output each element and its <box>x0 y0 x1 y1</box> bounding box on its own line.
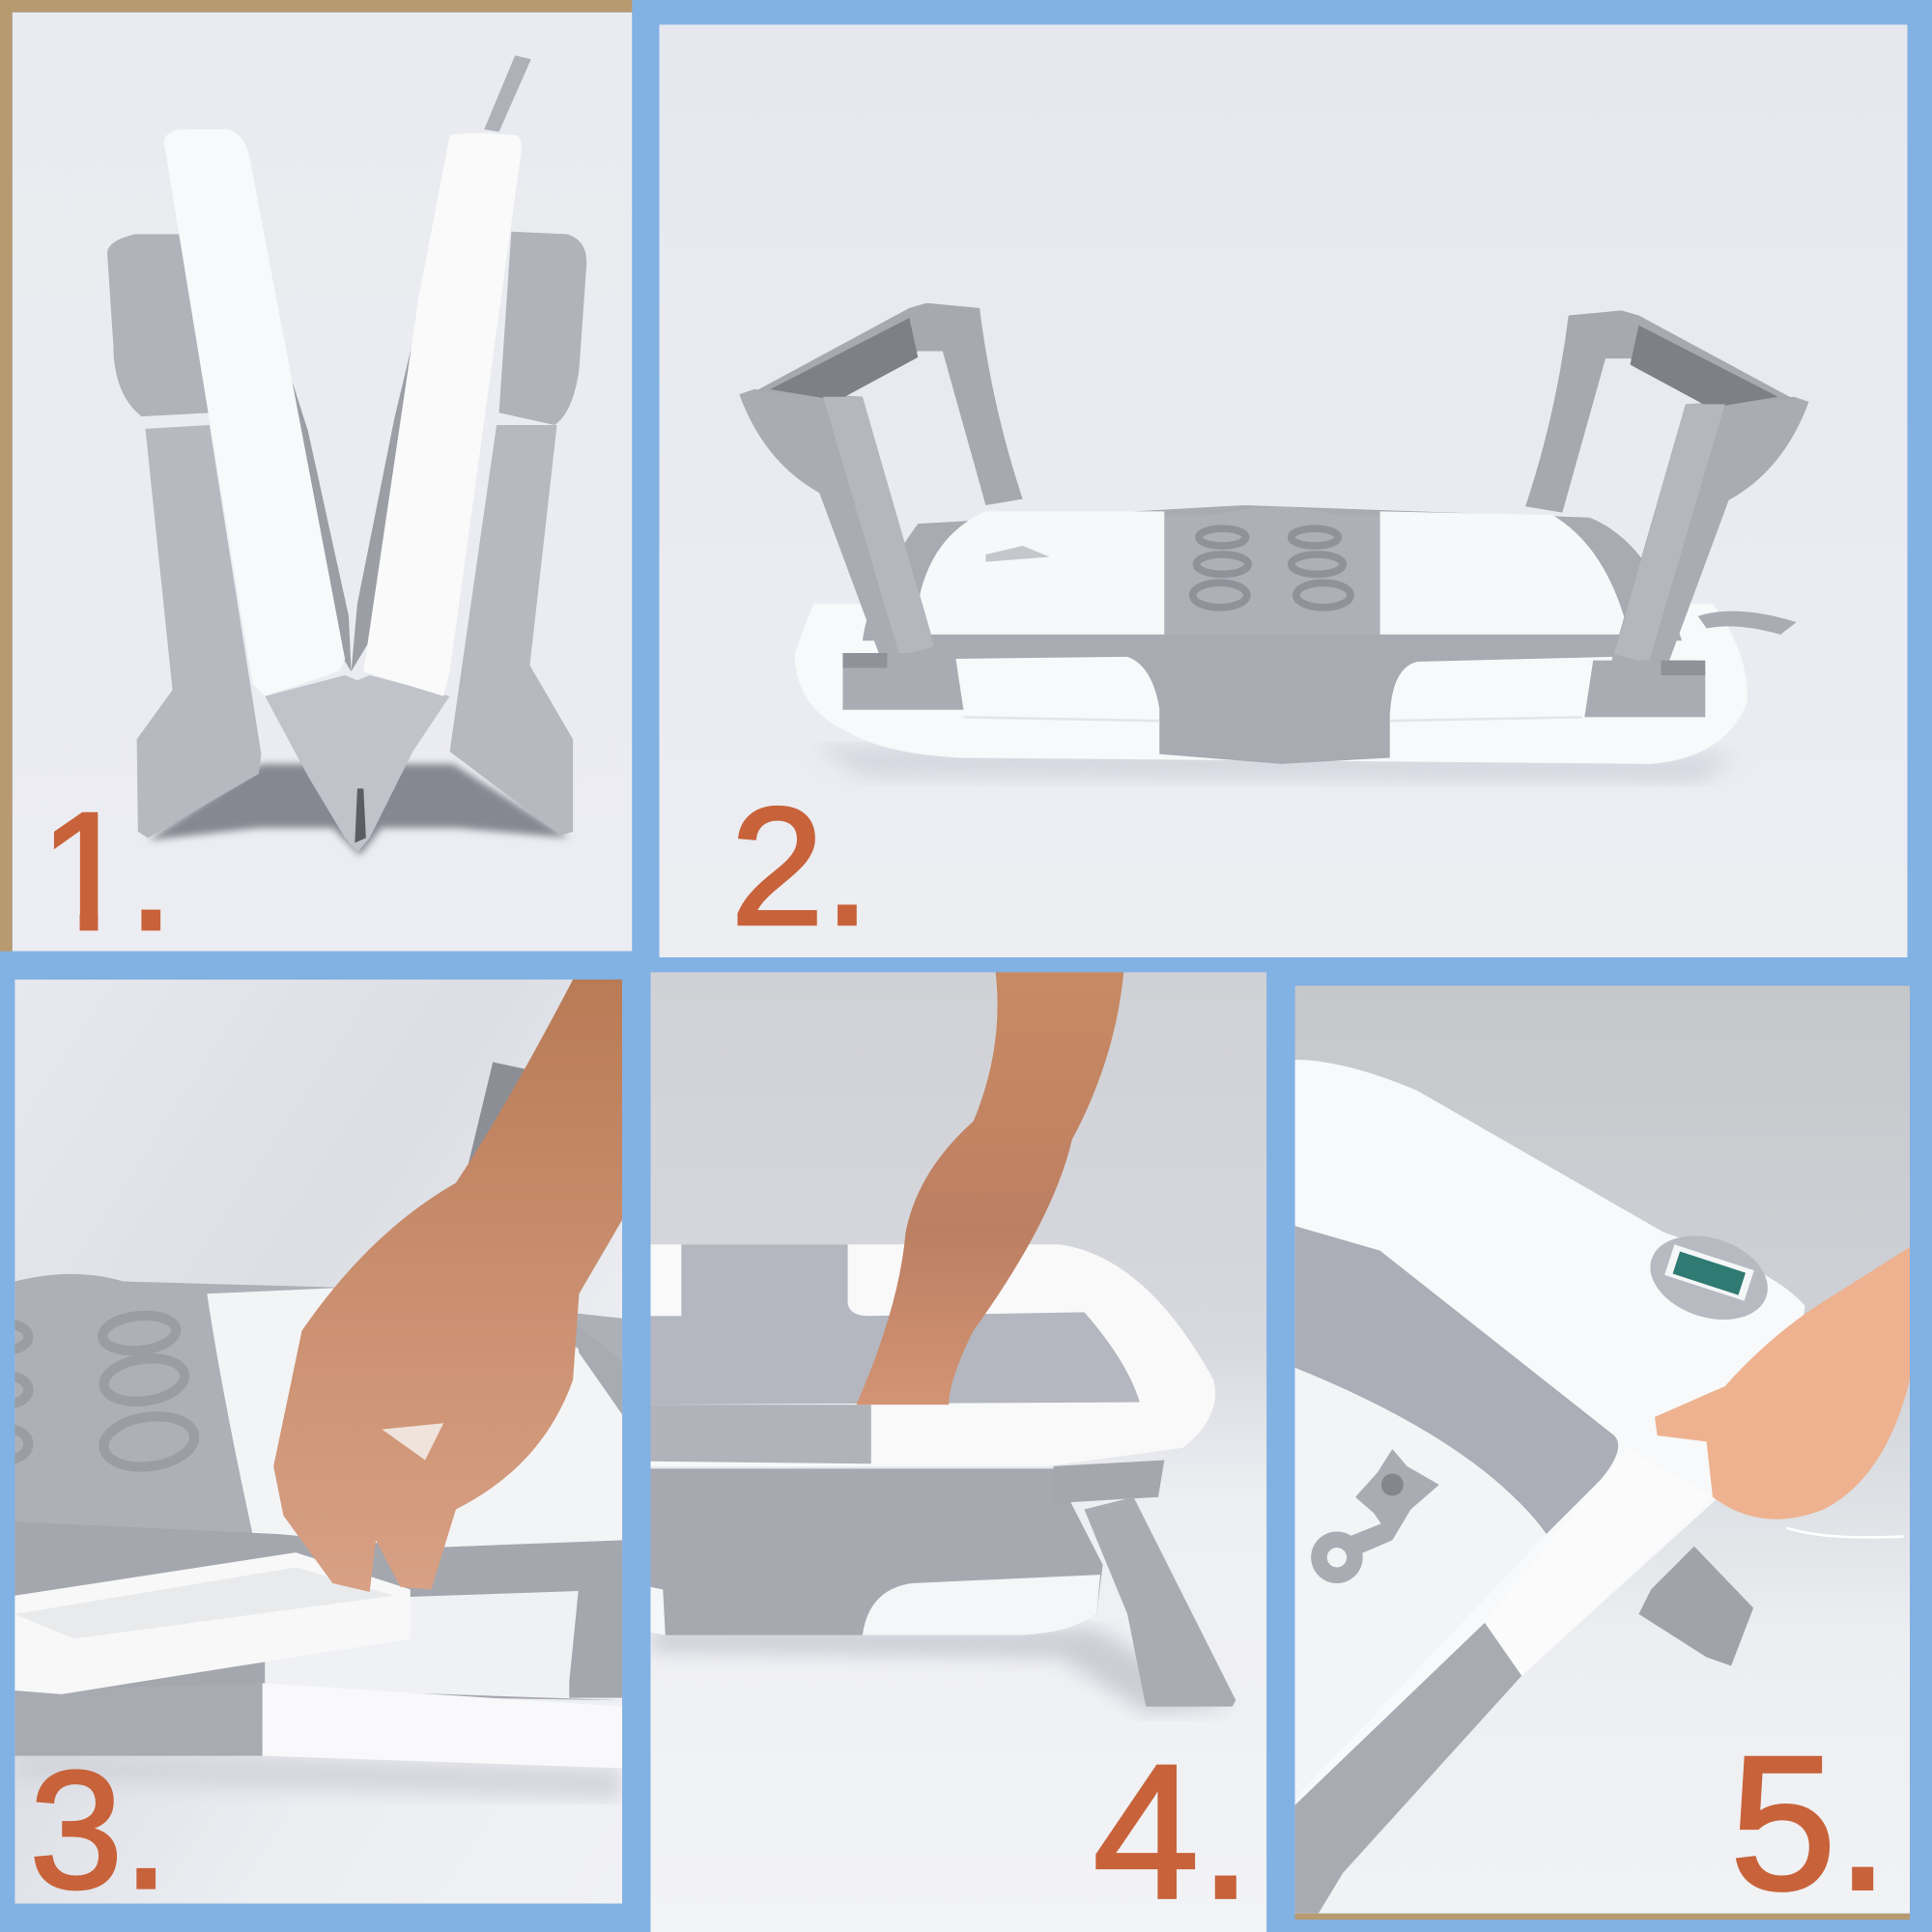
panel 5: hand locking the rim <box>1295 985 1910 1929</box>
folded tub photo <box>107 55 586 855</box>
step number 2: 2. <box>730 773 870 960</box>
tub photo <box>0 980 622 1799</box>
step number 4: 4. <box>1093 1724 1252 1932</box>
thermometer display <box>1650 1236 1768 1320</box>
tub photo <box>1295 1060 1910 1914</box>
panel 4: arm pressing open the tub <box>650 972 1266 1932</box>
tub photo <box>739 303 1808 782</box>
hand <box>1655 1247 1910 1520</box>
arm <box>856 972 1123 1405</box>
panel 3: hand unfolding the tub <box>0 980 622 1923</box>
hand <box>273 980 622 1592</box>
panel 2: open frame with folded tub <box>659 25 1907 960</box>
step number 5: 5. <box>1730 1716 1889 1929</box>
tan corner border <box>0 0 632 952</box>
tub photo <box>650 972 1236 1713</box>
tan bottom border <box>1295 1914 1910 1919</box>
step number 3: 3. <box>30 1736 169 1923</box>
panel 1: folded tub <box>13 13 632 965</box>
step number 1: 1. <box>40 778 174 965</box>
drain plug <box>1311 1449 1439 1583</box>
